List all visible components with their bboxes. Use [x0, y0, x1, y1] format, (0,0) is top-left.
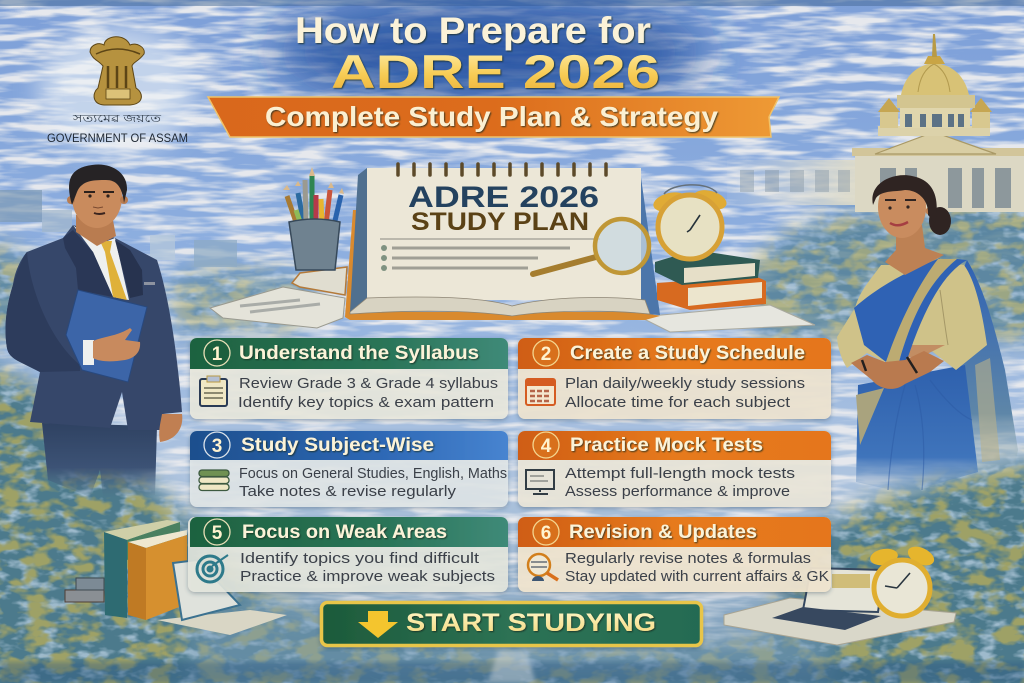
- step 4 text: Attempt full-length mock tests: [565, 465, 795, 482]
- number badge 1: [204, 340, 230, 366]
- step 5 text: Identify topics you find difficult: [240, 550, 480, 567]
- background building: assembly dome: [727, 34, 1024, 212]
- icon: magnifier: [528, 554, 558, 581]
- title: [295, 10, 660, 98]
- panel: step 1 understand the syllabus: [190, 338, 508, 419]
- panel: step 4 practice mock tests: [518, 431, 831, 507]
- icon: clipboard: [200, 376, 227, 406]
- heading 1: Understand the Syllabus: [239, 343, 479, 364]
- number badge 4: 4: [541, 436, 552, 457]
- label: government of assam: GOVERNMENT OF ASSAM: [47, 131, 188, 145]
- background city skyline: [0, 190, 237, 267]
- step 1 text line 2: Identify key topics & exam pattern: [238, 394, 494, 411]
- heading 3: Study Subject-Wise: [241, 435, 434, 456]
- icon: computer monitor: [526, 470, 554, 494]
- step 1 text: Review Grade 3 & Grade 4 syllabus: [239, 375, 498, 392]
- icon: book stack: [199, 470, 229, 490]
- number badge 3: [204, 432, 230, 458]
- panel: step 5 focus on weak areas: [188, 517, 508, 592]
- step 4 text line 2: Assess performance & improve: [565, 483, 790, 500]
- title backdrop: [275, 0, 705, 104]
- icon: magnifying glass: [533, 219, 649, 274]
- number badge 1: 1: [212, 344, 223, 365]
- step 3 text line 2: Take notes & revise regularly: [239, 483, 457, 500]
- title line 2: ADRE 2026: [331, 45, 660, 98]
- button: start studying: [322, 602, 702, 646]
- illustration: books bottom left: [65, 520, 287, 635]
- step 6 text: Regularly revise notes & formulas: [565, 550, 811, 567]
- subtitle text: Complete Study Plan & Strategy: [265, 101, 718, 132]
- subtitle ribbon: [208, 97, 779, 137]
- illustration: man in suit: [6, 164, 182, 497]
- panel: step 2 create a study schedule: [518, 338, 831, 419]
- illustration: laptop and clock bottom right: [724, 543, 956, 645]
- number badge 2: 2: [541, 344, 551, 365]
- icon: calendar: [526, 379, 555, 405]
- panel: step 6 revision and updates: [518, 517, 831, 592]
- title line 1: How to Prepare for: [295, 10, 651, 51]
- illustration: woman in blue sari: [837, 175, 1018, 493]
- notebook heading: ADRE 2026: [408, 181, 599, 214]
- notebook subheading: STUDY PLAN: [411, 208, 589, 236]
- heading 6: Revision & Updates: [569, 522, 757, 543]
- number badge 6: 6: [541, 523, 551, 544]
- heading 4: Practice Mock Tests: [570, 435, 763, 456]
- emblem: national emblem: [90, 37, 144, 105]
- number badge 6: [533, 519, 559, 545]
- icon: down arrow: [358, 611, 398, 638]
- panel: step 3 study subject-wise: [190, 431, 508, 507]
- number badge 4: [533, 432, 559, 458]
- number badge 3: 3: [212, 436, 222, 457]
- emblem motto: সত্যমেৱ জয়তে: [72, 113, 162, 125]
- number badge 2: [533, 340, 559, 366]
- icon: alarm clock: [651, 185, 729, 259]
- icon: target: [197, 555, 228, 582]
- heading 2: Create a Study Schedule: [570, 343, 805, 364]
- heading 5: Focus on Weak Areas: [242, 522, 447, 543]
- step 6 text line 2: Stay updated with current affairs & GK: [565, 568, 829, 585]
- step 3 text: Focus on General Studies, English, Maths: [239, 465, 507, 482]
- number badge 5: [204, 519, 230, 545]
- step 2 text line 2: Allocate time for each subject: [565, 394, 791, 411]
- icon: books stack: [655, 250, 766, 310]
- number badge 5: 5: [212, 523, 223, 544]
- step 5 text line 2: Practice & improve weak subjects: [240, 568, 495, 585]
- icon: pencil cup: [283, 167, 344, 270]
- step 2 text: Plan daily/weekly study sessions: [565, 375, 805, 392]
- button label: START STUDYING: [406, 609, 656, 637]
- illustration: papers under desk items: [210, 267, 815, 332]
- illustration: study plan notebook: [345, 164, 660, 320]
